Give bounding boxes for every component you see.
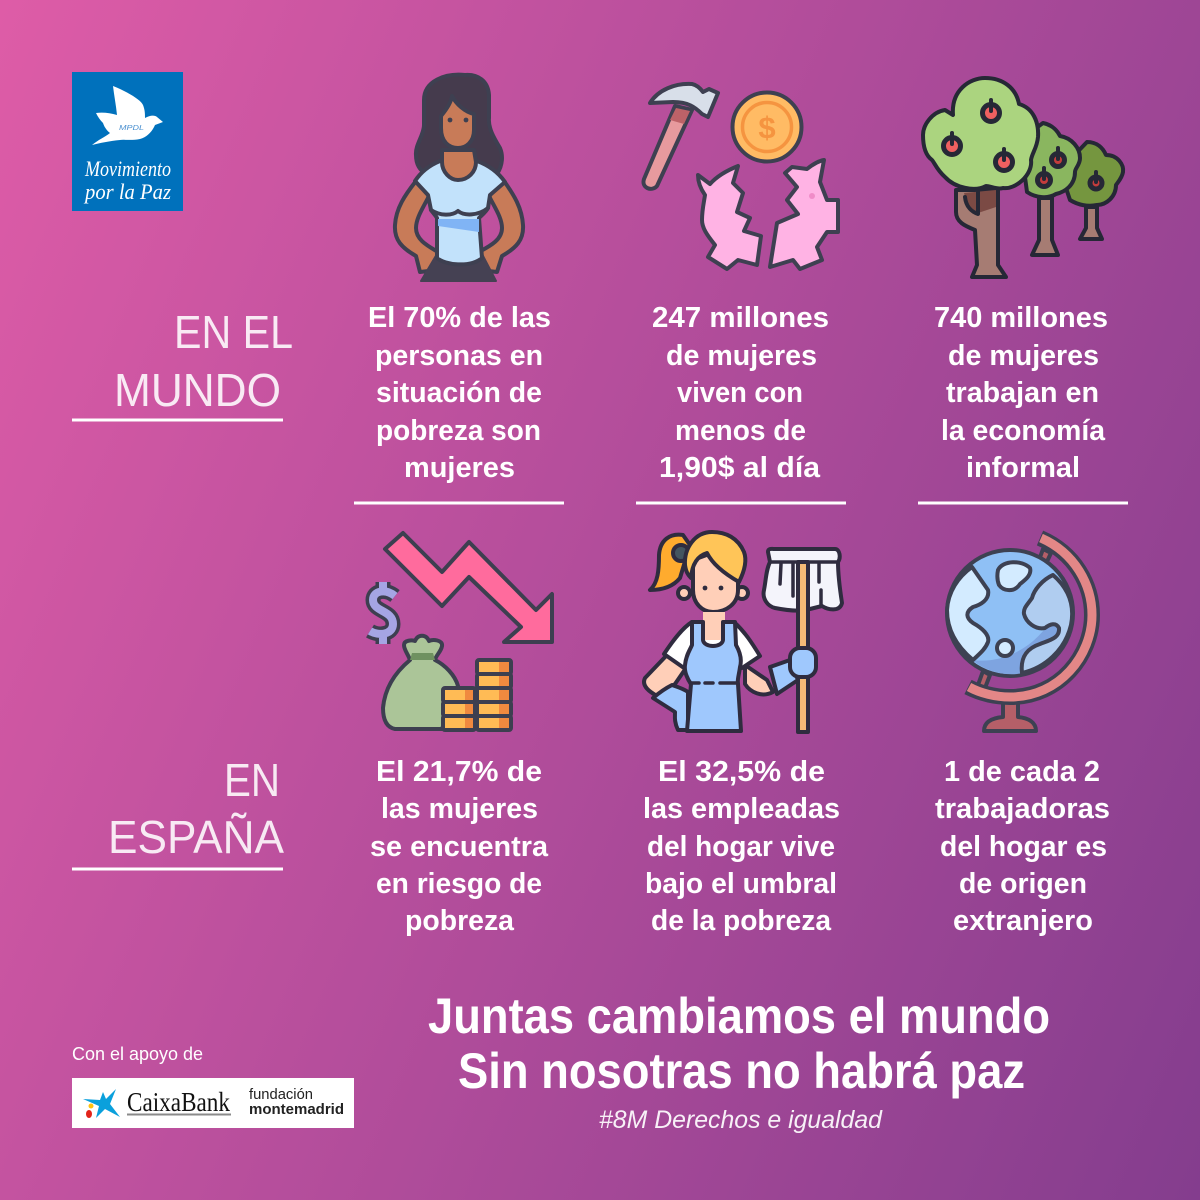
text: 247 millones: 247 millones xyxy=(652,302,829,334)
right continent xyxy=(1022,575,1072,673)
stand arc xyxy=(968,538,1092,697)
text: 740 millones: informal xyxy=(966,452,1080,484)
title line 2: Sin nosotras no habrá paz xyxy=(458,1043,1025,1099)
hashtag: #8M Derechos e igualdad xyxy=(599,1106,883,1134)
text: 740 millones: de mujeres xyxy=(948,340,1099,372)
shirt xyxy=(415,161,505,264)
logo: Movimiento por la Paz xyxy=(72,72,183,211)
text: 1 de cada 2: extranjero xyxy=(953,905,1093,937)
heading line 2: ESPAÑA xyxy=(108,811,284,863)
bag tie xyxy=(410,653,435,660)
logo name line 1: Movimiento xyxy=(84,156,171,181)
text: 70%: personas en xyxy=(375,340,543,372)
icon: caixabank star xyxy=(83,1089,120,1118)
text: 32,5%: las empleadas xyxy=(643,793,840,825)
hair bun xyxy=(673,545,689,561)
left arm xyxy=(395,181,438,272)
icon: white dove xyxy=(92,86,163,145)
trunk xyxy=(956,190,1006,277)
text: 70%: situación de xyxy=(376,377,542,409)
coin stacks xyxy=(443,660,511,730)
ears xyxy=(678,587,690,599)
globe base xyxy=(984,698,1036,731)
hair xyxy=(685,532,745,582)
logo initials: MPDL xyxy=(119,125,144,132)
text: 740 millones: 740 millones xyxy=(934,302,1108,334)
middle tree xyxy=(1020,123,1080,255)
text: 247 millones: menos de xyxy=(675,415,806,447)
apron belt xyxy=(690,681,738,685)
text: 70%: El 70% de las xyxy=(368,302,551,334)
heading: en españa: EN xyxy=(224,754,280,806)
text: 21,7%: en riesgo de xyxy=(376,868,542,900)
apron xyxy=(685,622,741,731)
branch xyxy=(965,192,978,214)
text: 740 millones: trabajan en xyxy=(946,377,1099,409)
right glove xyxy=(770,660,798,694)
eyes xyxy=(448,118,452,122)
text: 247 millones: 1,90$ al día xyxy=(659,452,821,484)
heading: en el mundo xyxy=(114,306,293,416)
hammer handle xyxy=(643,106,692,189)
neck xyxy=(703,612,725,640)
small island xyxy=(997,640,1013,656)
icon: falling arrow with money xyxy=(370,533,552,730)
left glove xyxy=(653,685,688,730)
small tree xyxy=(1060,142,1123,239)
mop head xyxy=(764,549,842,611)
text: 740 millones: la economía xyxy=(941,415,1106,447)
text: 32,5%: bajo el umbral xyxy=(645,868,837,900)
face xyxy=(441,96,474,148)
big tree xyxy=(923,78,1038,277)
text: 70%: pobreza son xyxy=(376,415,541,447)
fundacion: fundación xyxy=(249,1087,313,1103)
text: 32,5%: del hogar vive xyxy=(647,831,835,863)
text: 21,7%: se encuentra xyxy=(370,831,549,863)
left arm xyxy=(644,655,686,696)
text: 32,5%: de la pobreza xyxy=(651,905,832,937)
text: 1 de cada 2: 1 de cada 2 xyxy=(944,756,1100,788)
ponytail xyxy=(650,535,690,590)
shadow xyxy=(972,590,1070,674)
icon: broken piggy bank xyxy=(698,160,838,269)
montemadrid: montemadrid xyxy=(249,1102,344,1118)
neck xyxy=(442,150,476,180)
icon: globe xyxy=(947,538,1092,731)
text: 21,7%: pobreza xyxy=(405,905,515,937)
heading: en el mundo: EN EL xyxy=(174,306,293,358)
left half xyxy=(698,166,761,269)
mop strands xyxy=(770,562,836,606)
trunk shade xyxy=(964,190,996,213)
icon: hammer xyxy=(643,84,718,189)
dollar fill xyxy=(370,582,395,644)
title: Juntas cambiamos el mundo xyxy=(428,988,1050,1044)
mitt xyxy=(790,648,816,677)
hammer head xyxy=(650,84,718,117)
text: 1 de cada 2: del hogar es xyxy=(940,831,1107,863)
icon: cleaner with mop xyxy=(644,532,842,732)
text: 247 millones: de mujeres xyxy=(666,340,817,372)
icon: dollar coin xyxy=(732,92,802,162)
heading: en españa xyxy=(108,754,284,863)
text: con el apoyo de: Con el apoyo de xyxy=(72,1044,203,1064)
handle shade xyxy=(670,108,690,124)
text: 21,7%: El 21,7% de xyxy=(376,756,542,788)
apples xyxy=(982,104,1000,122)
shirt band xyxy=(438,219,479,232)
text: 21,7%: las mujeres xyxy=(381,793,538,825)
text: 1 de cada 2: de origen xyxy=(959,868,1087,900)
logo name line 2: por la Paz xyxy=(83,179,171,204)
canopy xyxy=(923,78,1038,189)
text: 1 de cada 2: trabajadoras xyxy=(935,793,1110,825)
right arm xyxy=(745,665,773,694)
dollar sign: $ xyxy=(758,110,776,145)
bust line xyxy=(431,208,488,215)
shirt xyxy=(664,622,760,668)
sphere xyxy=(947,550,1073,676)
right half xyxy=(770,160,838,269)
axis stubs xyxy=(978,549,1051,688)
eyes xyxy=(703,586,707,590)
skirt xyxy=(421,254,496,281)
face xyxy=(693,553,738,612)
hair xyxy=(416,75,502,174)
left continent xyxy=(947,567,988,660)
text: 70%: mujeres xyxy=(404,452,515,484)
caixabank name: CaixaBank xyxy=(127,1087,230,1117)
title xyxy=(428,988,1050,1134)
text: 247 millones: viven con xyxy=(677,377,803,409)
arrow xyxy=(385,533,552,642)
icon: woman xyxy=(395,75,523,281)
money bag xyxy=(383,636,458,729)
top island xyxy=(997,562,1030,590)
mop handle xyxy=(798,562,808,732)
heading line 2: MUNDO xyxy=(114,364,281,416)
icon: fruit trees xyxy=(923,78,1123,277)
dollar outline xyxy=(370,582,395,644)
pig eye xyxy=(809,193,815,199)
sponsor logos xyxy=(72,1078,354,1128)
right arm xyxy=(479,181,523,272)
text: 32,5%: El 32,5% de xyxy=(658,756,825,788)
